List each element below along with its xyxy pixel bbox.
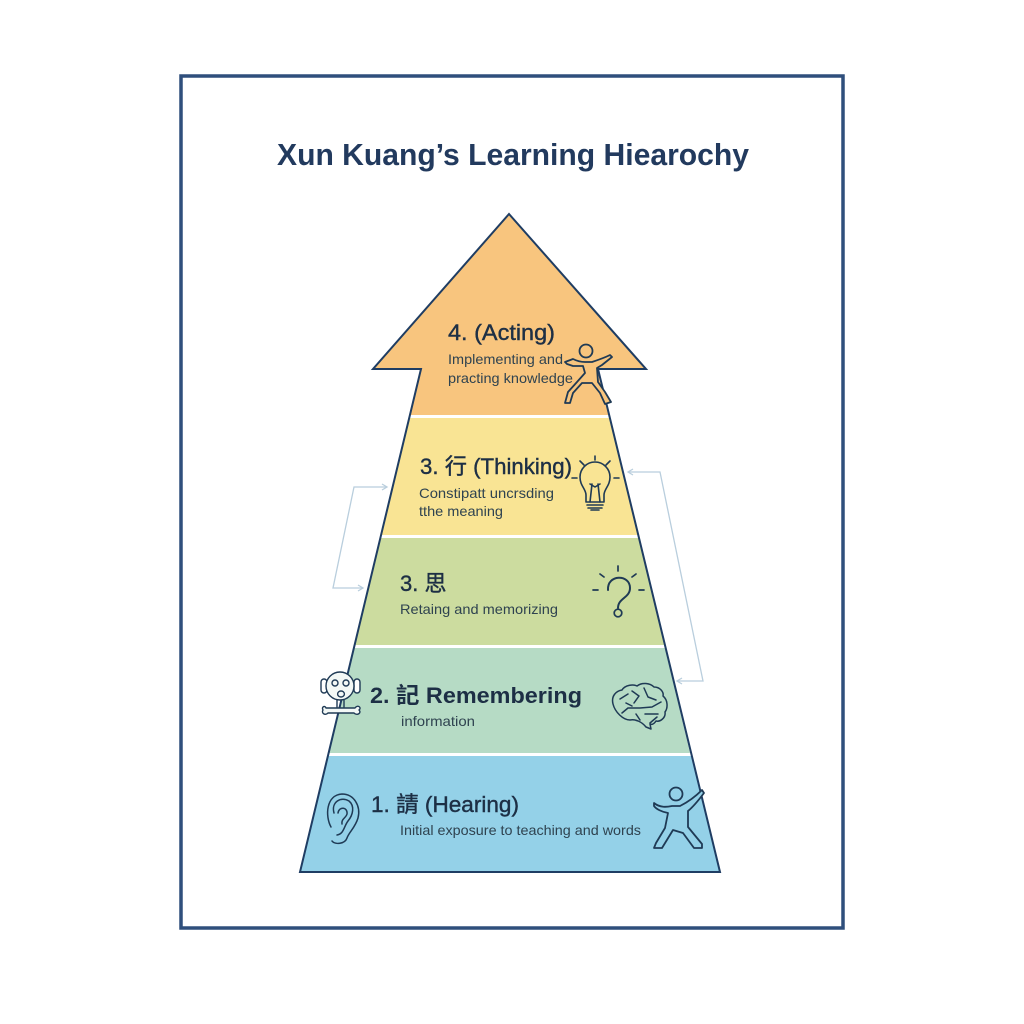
level 4 text: Implementing and	[448, 351, 563, 367]
level 1 band: hearing	[300, 756, 720, 872]
arrow: right feedback loop	[628, 469, 703, 684]
icon: robot head	[321, 672, 360, 714]
level 2 text: information	[401, 713, 475, 729]
level 3 memorizing text: 3. 思	[400, 571, 446, 596]
icon: ear	[328, 794, 359, 843]
level 3 band: memorizing	[354, 538, 664, 645]
level 1 text	[371, 792, 641, 838]
icon: light bulb	[572, 456, 619, 510]
level 4 band: acting	[373, 214, 646, 415]
level 4 text: practing knowledge	[448, 370, 573, 386]
pyramid arrow	[300, 214, 720, 872]
level 3 thinking text: 3. 行 (Thinking)	[420, 454, 572, 479]
outer frame	[181, 76, 843, 928]
level 2 band: remembering	[329, 648, 690, 753]
level 3 thinking text: tthe meaning	[419, 503, 503, 519]
level 3 memorizing text: Retaing and memorizing	[400, 601, 558, 617]
icon: acting figure	[565, 344, 612, 404]
level 4 text	[448, 320, 573, 386]
pyramid outline	[300, 214, 720, 872]
level 3 memorizing text	[400, 571, 558, 617]
icon: brain	[613, 683, 667, 729]
level 1 text: Initial exposure to teaching and words	[400, 822, 641, 838]
icon: question mark	[593, 566, 644, 617]
icon: stance figure	[654, 788, 704, 848]
level 2 text: 2. 記 Remembering	[370, 683, 582, 708]
level 2 text	[370, 683, 582, 729]
level 1 text: 1. 請 (Hearing)	[371, 792, 519, 817]
arrow: left feedback loop	[333, 484, 387, 591]
level 3 thinking text	[419, 454, 572, 519]
level 3 band: thinking	[381, 418, 638, 535]
level 3 thinking text: Constipatt uncrsding	[419, 485, 554, 501]
title: Xun Kuang’s Learning Hiearochy	[277, 137, 750, 172]
level 4 text: 4. (Acting)	[448, 320, 555, 345]
